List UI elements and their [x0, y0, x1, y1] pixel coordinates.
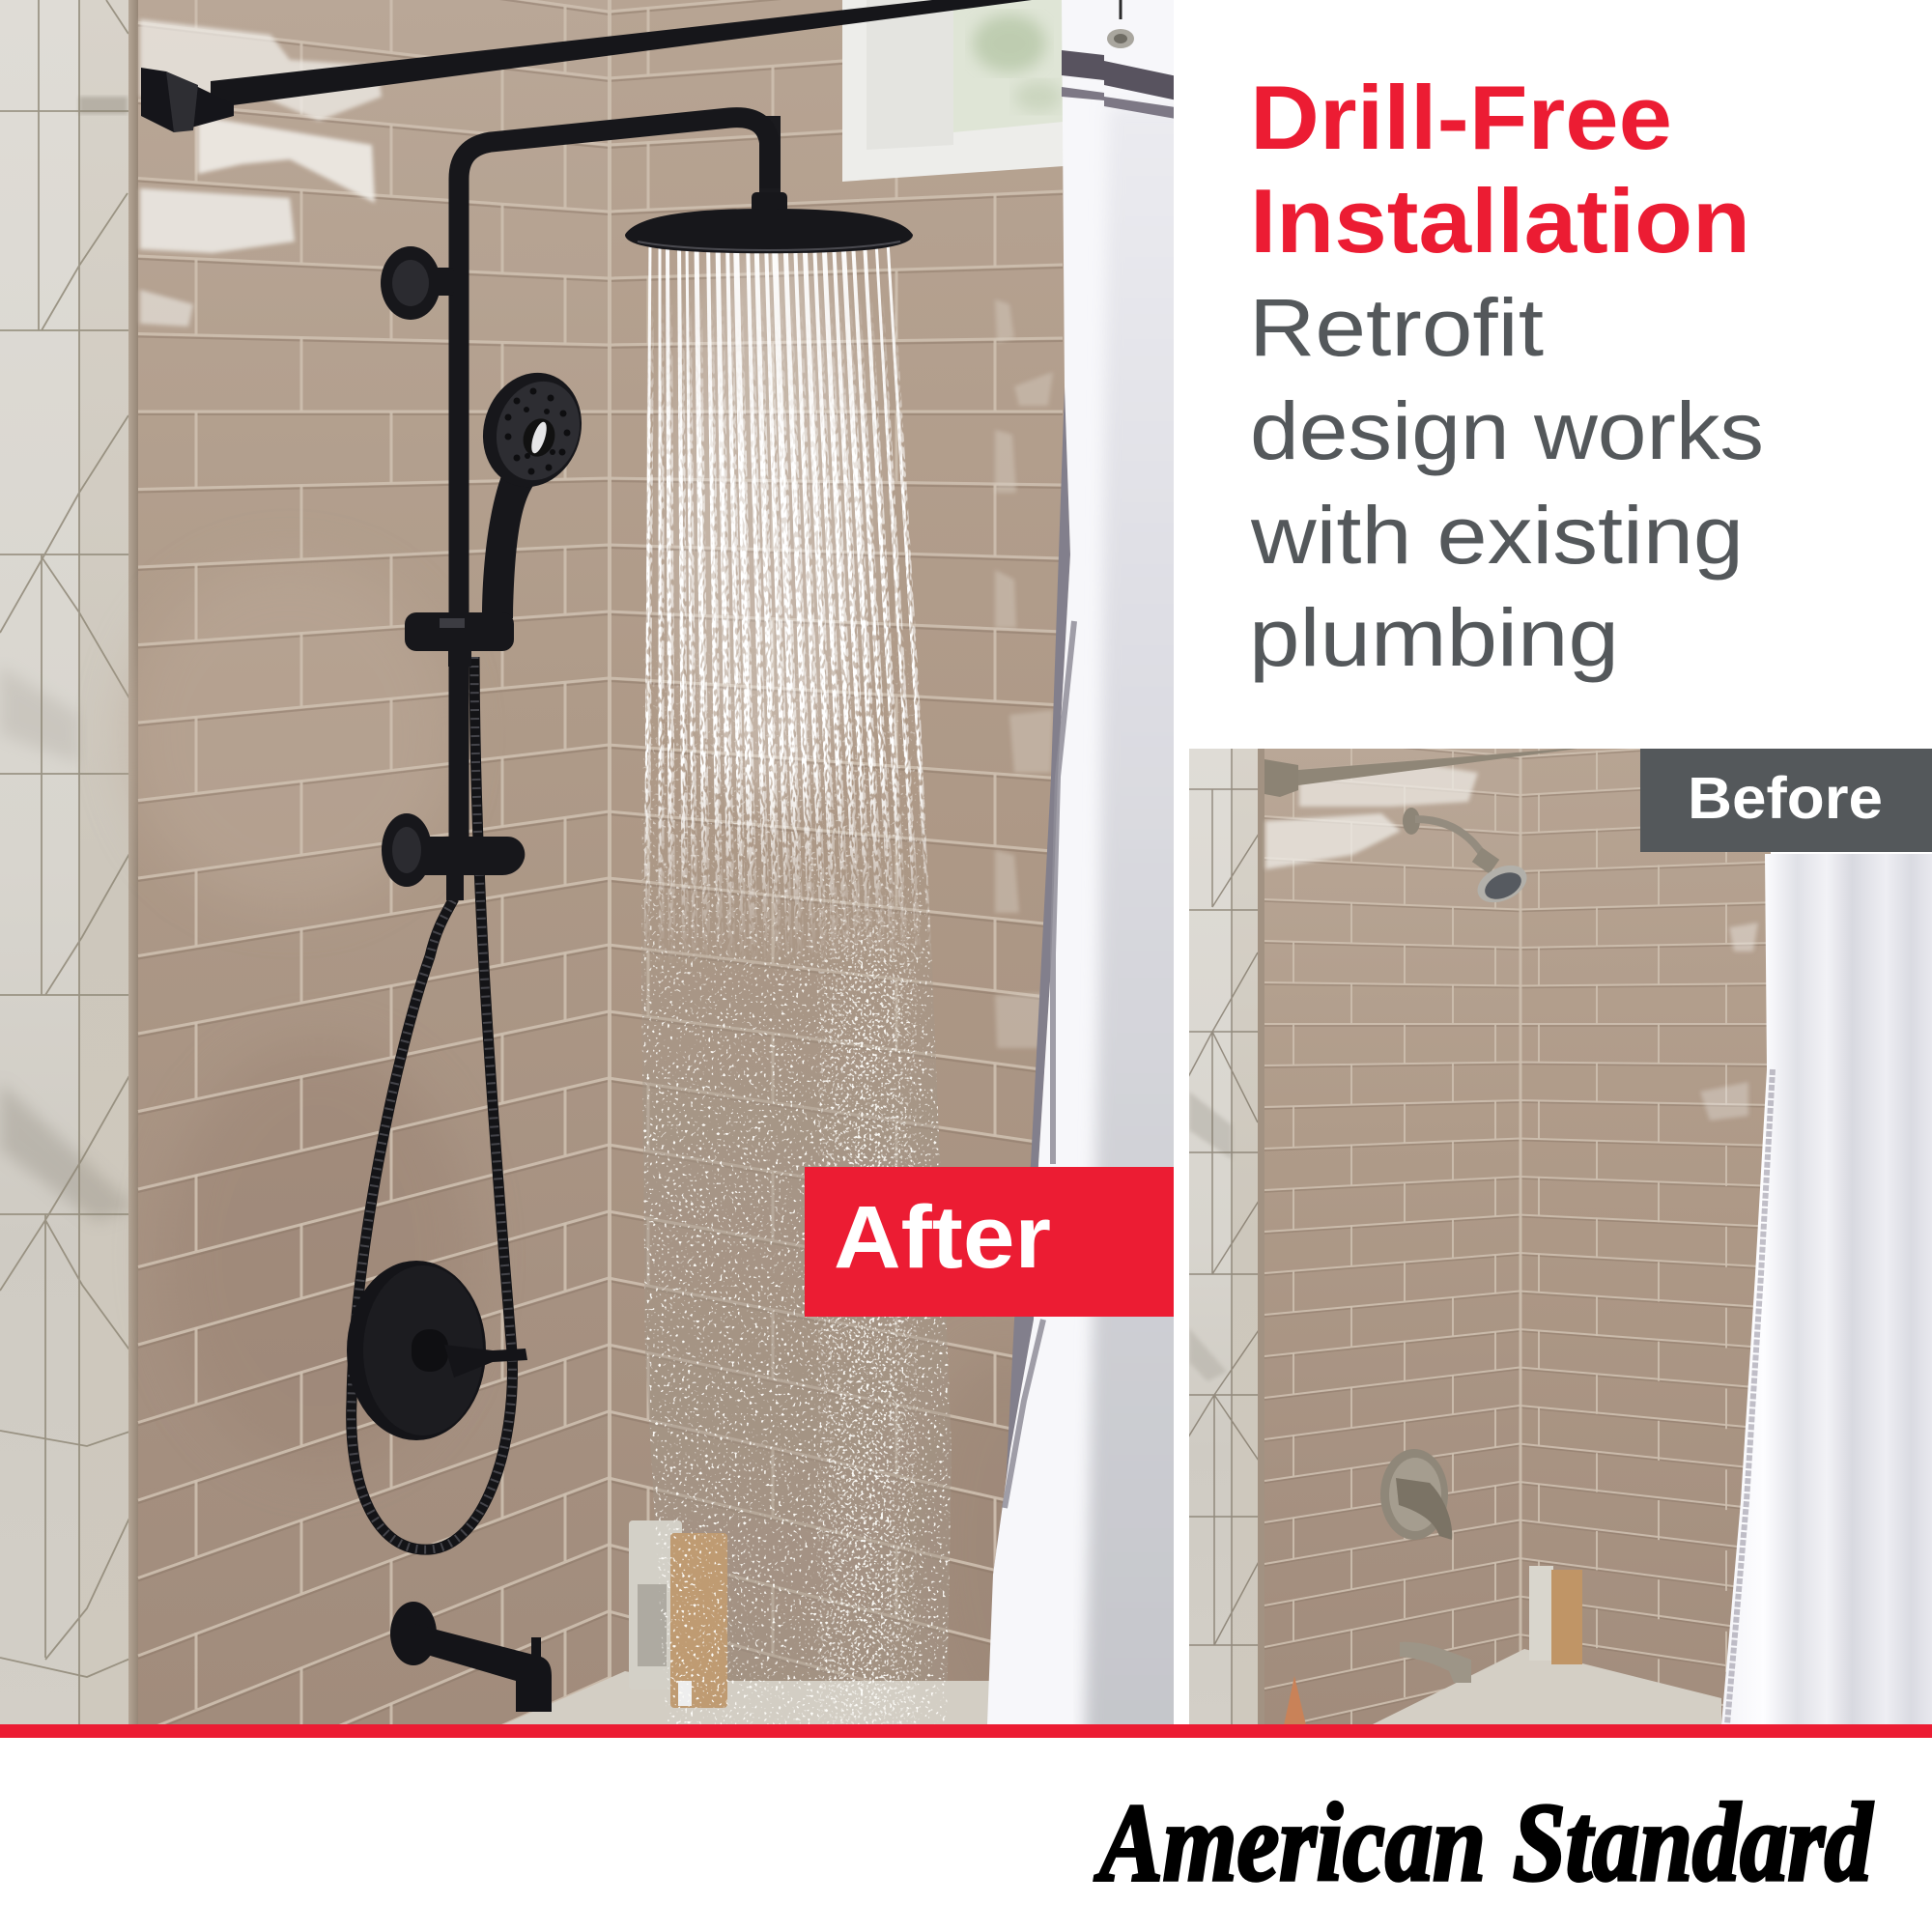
toiletry bottles: [1284, 1566, 1582, 1725]
before label: Before: [1688, 765, 1883, 831]
hand shower: [482, 373, 582, 618]
window: [842, 0, 1064, 182]
brushed nickel curtain rod: [1264, 748, 1577, 797]
bathtub: [1284, 1566, 1721, 1725]
shower curtain: [1721, 854, 1932, 1724]
after label: After: [834, 1188, 1051, 1287]
after label: [805, 1167, 1174, 1317]
lower wall mount and diverter: [382, 813, 525, 900]
american standard logo: Standard: [1513, 1781, 1873, 1904]
wall tone variation: [122, 667, 404, 1171]
white geometric tile wall: [0, 0, 138, 1724]
description text: with existing: [1250, 490, 1744, 581]
tub spout: [390, 1602, 552, 1712]
shower curtain: [987, 0, 1198, 1739]
old shower head: [1403, 808, 1533, 910]
old valve trim: [1380, 1449, 1452, 1540]
heading: drill-free installation: [1250, 67, 1750, 271]
water streaks: [645, 247, 923, 821]
bright droplet column: [817, 895, 916, 1724]
shower valve trim: [347, 1261, 527, 1440]
heading: drill-free installation: Installation: [1250, 170, 1750, 271]
water droplets: [641, 638, 952, 1724]
bathtub: [504, 1520, 990, 1724]
grout lines: [138, 0, 1063, 1889]
heading: drill-free installation: Drill-Free: [1250, 67, 1672, 168]
rain shower head: [625, 116, 913, 253]
red divider bar: [0, 1724, 1932, 1738]
flexible hose: [352, 657, 512, 1549]
grout shadow lines: [138, 0, 1063, 1891]
curtain rod: [141, 0, 1032, 132]
toiletry bottles: [629, 1520, 727, 1708]
dotted streak droplets: [643, 312, 931, 952]
description text: Retrofit: [1249, 282, 1544, 373]
photo: before installation: [1188, 695, 1932, 1774]
american standard logo: American: [1094, 1781, 1486, 1904]
photo: after shower installation: [0, 0, 1174, 1724]
sliding holder: [405, 612, 514, 667]
tiled walls: [1264, 695, 1777, 1774]
before label: [1640, 749, 1932, 852]
description text: [1249, 282, 1764, 683]
falling water: [628, 242, 966, 1729]
glossy reflection on tile: [1265, 763, 1758, 1121]
water tone behind spray: [638, 237, 956, 1729]
description text: design works: [1250, 385, 1764, 476]
old tub spout: [1400, 1642, 1471, 1683]
american standard logo: [1094, 1781, 1873, 1904]
tiled wall: [122, 0, 1070, 1724]
vertical tile joints: [196, 0, 995, 1724]
shower riser and arm: [381, 118, 770, 850]
description text: plumbing: [1249, 592, 1619, 683]
white tile wall: [1188, 749, 1264, 1724]
upper wall mount: [381, 246, 454, 320]
glossy reflection on tile: [140, 19, 382, 327]
